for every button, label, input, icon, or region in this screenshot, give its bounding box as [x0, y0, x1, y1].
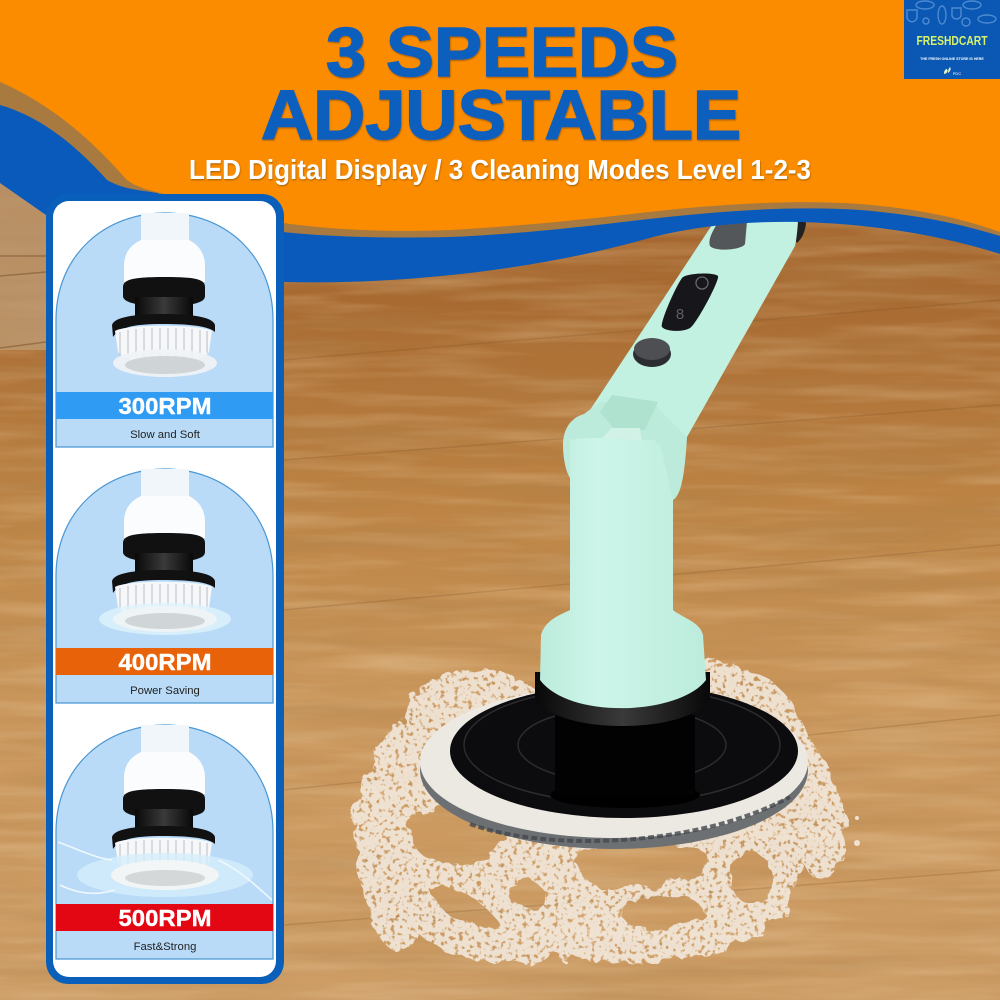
lower body: [540, 438, 706, 708]
subtitle: LED Digital Display / 3 Cleaning Modes Level 1-2-3: [189, 154, 811, 185]
card: 500RPM: Fast&Strong: [134, 941, 196, 953]
orange header wave with brown and blue bands: [0, 0, 1000, 282]
logo: FreshdCart: PDC: [953, 71, 961, 76]
card: 300RPM: [56, 213, 273, 447]
pad and disc: [420, 684, 808, 849]
card: 500RPM: 500RPM: [118, 905, 212, 931]
logo: FreshdCart: THE FRESH ONLINE STORE IS HERE: [920, 57, 984, 61]
card: 400RPM: 400RPM: [118, 649, 212, 675]
title: [261, 13, 741, 154]
title: 3 SPEEDS: [326, 13, 678, 91]
product: spin scrubber: [420, 190, 808, 849]
title: ADJUSTABLE: [261, 76, 741, 154]
black collar: [535, 672, 710, 726]
control: LED display: [662, 274, 718, 331]
card: 300RPM: 300RPM: [118, 393, 212, 419]
card: 400RPM: Power Saving: [130, 685, 200, 697]
card: 300RPM: Slow and Soft: [130, 429, 201, 441]
handle: [563, 190, 806, 500]
control: speed button: [709, 210, 748, 250]
control: LED display: 8: [676, 306, 684, 323]
panel: speed modes: [46, 194, 284, 984]
card: 400RPM: [56, 469, 273, 703]
card: 500RPM: [56, 725, 273, 959]
control: round knob: [633, 338, 671, 367]
soap foam: [355, 660, 860, 964]
logo: FreshdCart: [904, 0, 1000, 79]
